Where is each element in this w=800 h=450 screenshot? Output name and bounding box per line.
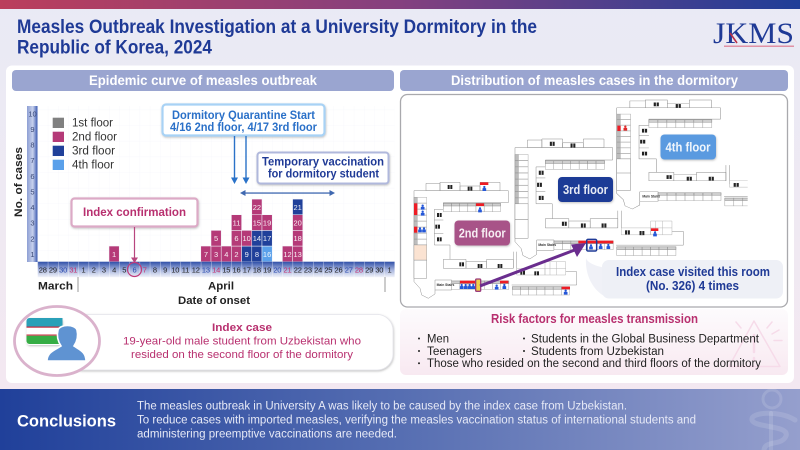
text: conclusions: administering preemptive vaccinations are needed. (137, 428, 397, 440)
arrows: quarantine start dates (231, 136, 250, 184)
list: risk factors: Students in the Global Business Department (531, 333, 760, 345)
bars (109, 199, 303, 262)
x axis dates: 27 (345, 266, 353, 274)
case numbers: 17 (263, 234, 271, 243)
arrow: vaccination period (240, 190, 335, 196)
panel: conclusions (0, 389, 800, 450)
case numbers: 6 (234, 234, 239, 243)
case numbers: 20 (294, 219, 302, 228)
callout: index case visited room (586, 258, 783, 298)
heading: conclusions: Conclusions (17, 413, 116, 431)
y axis: 5 (30, 187, 35, 196)
floor plan: 2nd floor (414, 182, 577, 298)
month labels: April (208, 280, 234, 292)
month labels (38, 277, 385, 292)
x axis dates: 20 (273, 266, 281, 274)
title (17, 16, 537, 58)
text: index case: 19-year-old male student from Uzbekistan who (123, 335, 361, 347)
y axis: 1 (30, 250, 35, 259)
title: Republic of Korea, 2024 (17, 36, 212, 58)
floor plans (414, 100, 748, 299)
x axis dates: 14 (212, 266, 220, 274)
floor plan: 3rd floor (515, 139, 683, 259)
callout: temporary vaccination (258, 152, 388, 184)
case numbers: 3 (214, 250, 218, 259)
x axis dates: 11 (182, 266, 189, 274)
x axis dates: 22 (294, 266, 302, 274)
text: index case: Index case (212, 322, 272, 334)
floor plan: 3rd floor: Main Stairs (538, 243, 556, 247)
y axis: 10 (28, 109, 37, 118)
text: index case (123, 322, 361, 361)
x axis dates: 1 (388, 266, 392, 274)
label: 4th floor: 4th floor (666, 140, 711, 154)
x axis dates: 17 (243, 266, 251, 274)
x axis dates: 31 (69, 266, 77, 274)
panel: index case (14, 306, 393, 376)
x axis dates: 18 (253, 266, 261, 274)
callout: dormitory quarantine start: 4/16 2nd floor, 4/17 3rd floor (170, 122, 317, 134)
x axis dates: 29 (49, 266, 57, 274)
heading: risk factors: Risk factors for measles transmission (491, 312, 698, 326)
case numbers: 18 (294, 234, 302, 243)
y axis: 3 (30, 219, 35, 228)
legend: 3rd floor (72, 146, 115, 158)
x axis dates: 3 (102, 266, 106, 274)
case numbers: 16 (263, 250, 271, 259)
icon: warning triangle (729, 321, 782, 366)
y axis: 8 (30, 140, 35, 150)
case numbers: 19 (263, 219, 271, 228)
x axis dates: 28 (355, 266, 363, 274)
panel: distribution of cases (400, 70, 796, 307)
case numbers: 21 (294, 203, 302, 212)
x axis dates: 9 (163, 266, 167, 274)
case numbers: 2 (234, 250, 239, 259)
case numbers: 1 (112, 250, 116, 259)
legend: 1st floor (72, 118, 113, 130)
callout: index case visited room: Index case visited this room (616, 265, 770, 279)
x axis dates: 26 (335, 266, 342, 274)
x axis dates: 28 (39, 266, 47, 274)
x axis dates: 6 (133, 266, 137, 274)
panel: risk factors (400, 309, 788, 375)
list: risk factors: Students from Uzbekistan (531, 346, 664, 358)
x axis dates: 25 (324, 266, 332, 274)
case numbers: 4 (224, 250, 228, 259)
case numbers: 14 (253, 234, 261, 243)
case numbers: 7 (204, 250, 208, 259)
icon: caduceus (752, 390, 795, 450)
x axis dates: 2 (92, 266, 96, 274)
y axis: 7 (30, 156, 35, 165)
label: 3rd floor: 3rd floor (563, 183, 608, 197)
callout: temporary vaccination: for dormitory student (268, 168, 379, 180)
heading: epidemic curve: Epidemic curve of measles outbreak (89, 73, 317, 88)
case numbers: 5 (214, 234, 218, 243)
label: 3rd floor (558, 177, 613, 202)
floor plan: 2nd floor: Main Stairs (437, 283, 455, 287)
main white panel (6, 66, 794, 383)
floor plan: 4th floor: Main Stairs (642, 195, 660, 199)
icon: flag and person (14, 306, 100, 376)
text: index case: resided on the second floor of the dormitory (131, 349, 354, 361)
x axis dates: 13 (202, 266, 210, 274)
callout: index confirmation (72, 198, 198, 226)
arrow: index confirmation to April 6 (128, 227, 142, 276)
label: 2nd floor: 2nd floor (459, 226, 506, 240)
callout: temporary vaccination: Temporary vaccination (262, 157, 384, 169)
x axis dates: 5 (122, 266, 126, 274)
x axis dates: 10 (171, 266, 179, 274)
list: risk factors: Those who resided on the second and third floors of the dormitory (427, 358, 761, 370)
x axis dates: 15 (222, 266, 230, 274)
x axis dates: 29 (365, 266, 373, 274)
callout: dormitory quarantine start (162, 104, 324, 136)
heading: epidemic curve (12, 70, 394, 91)
case numbers: 13 (294, 250, 302, 259)
callout: index confirmation: Index confirmation (83, 205, 186, 219)
top colour bar (0, 0, 800, 9)
x axis title: Date of onset (178, 295, 250, 307)
case numbers (112, 203, 302, 259)
x axis dates: 23 (304, 266, 312, 274)
callout: index case visited room: (No. 326) 4 times (646, 279, 739, 293)
x axis dates: 12 (192, 266, 200, 274)
logo: JKMS: JKMS (713, 17, 794, 50)
list: risk factors (418, 333, 761, 370)
y axis: 2 (30, 234, 35, 243)
month labels: March (38, 280, 73, 292)
x axis dates: 30 (59, 266, 67, 274)
list: risk factors: Men (427, 333, 449, 345)
x axis dates (38, 262, 395, 277)
case numbers: 12 (283, 250, 292, 259)
arrow: index case path to room 326 (480, 243, 586, 286)
text: conclusions: To reduce cases with imported measles, verifying the measles vaccination status of international students and (137, 414, 696, 426)
heading: distribution (400, 70, 788, 91)
title: Measles Outbreak Investigation at a University Dormitory in the (17, 16, 537, 38)
case numbers: 22 (253, 203, 261, 212)
floor plan: 4th floor (616, 100, 748, 210)
heading: distribution: Distribution of measles cases in the dormitory (451, 73, 738, 88)
x axis dates: 7 (143, 266, 147, 274)
case numbers: 11 (233, 219, 240, 228)
legend: 4th floor (72, 160, 114, 172)
label: 4th floor (660, 134, 716, 160)
x axis dates: 19 (263, 266, 271, 274)
legend (53, 118, 117, 172)
list: risk factors: Teenagers (427, 346, 482, 358)
y axis title: No. of cases (13, 147, 25, 217)
case numbers: 15 (253, 219, 261, 228)
y axis (27, 106, 38, 262)
x axis dates: 4 (112, 266, 116, 274)
panel: epidemic curve (12, 70, 395, 307)
x axis dates: 30 (375, 266, 383, 274)
case numbers: 10 (243, 234, 251, 243)
case numbers: 8 (255, 250, 259, 259)
text: conclusions (137, 400, 696, 440)
x axis dates: 1 (82, 266, 86, 274)
x axis dates: 24 (314, 266, 322, 274)
case numbers: 9 (245, 250, 249, 259)
x axis dates: 21 (284, 266, 291, 274)
x axis dates: 8 (153, 266, 157, 274)
y axis: 9 (30, 125, 35, 134)
y axis: 6 (30, 172, 35, 181)
label: 2nd floor (454, 220, 510, 246)
y axis: 4 (30, 203, 35, 212)
text: conclusions: The measles outbreak in University A was likely to be caused by the index case from Uzbekistan. (137, 400, 627, 412)
callout: dormitory quarantine start: Dormitory Quarantine Start (172, 110, 315, 122)
x axis dates: 16 (233, 266, 240, 274)
legend: 2nd floor (72, 132, 117, 144)
